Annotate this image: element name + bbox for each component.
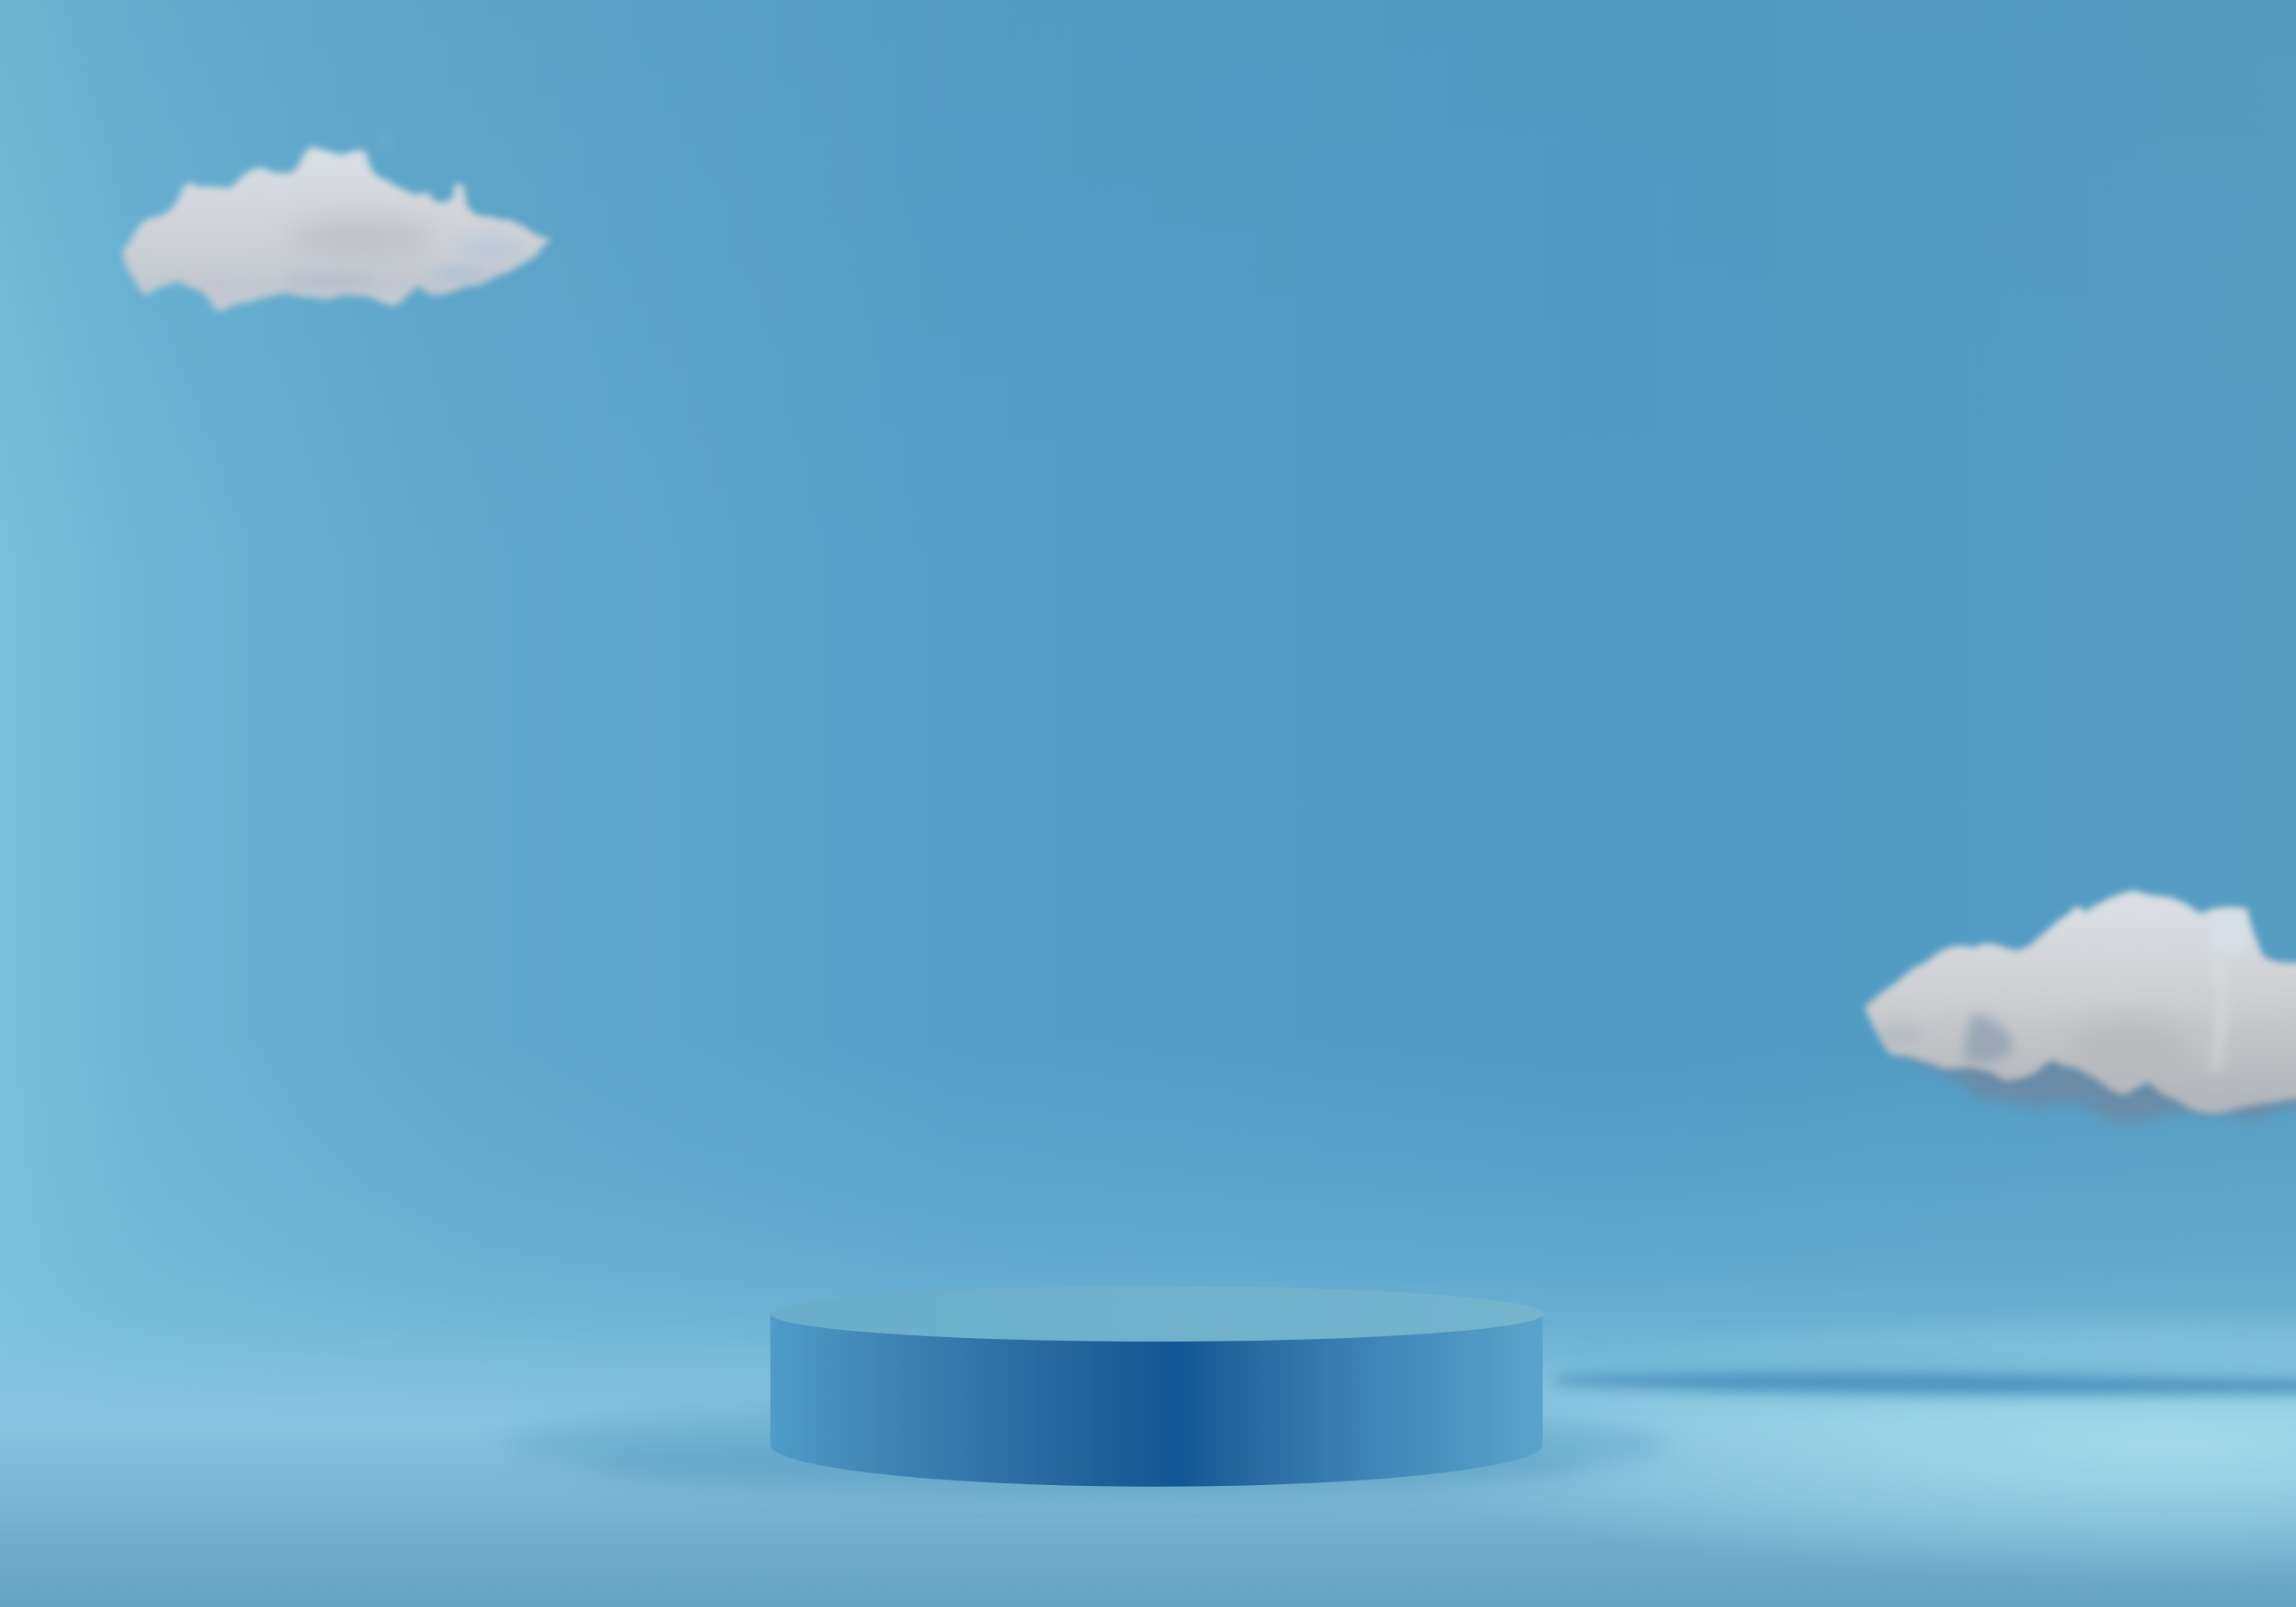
cloud body [1865, 890, 2296, 1115]
shadow band on the right horizon [1556, 1359, 2296, 1394]
cloud right edge [1865, 890, 2296, 1122]
podium contact shadow on floor [504, 1401, 1670, 1490]
podium top surface [770, 1286, 1544, 1342]
podium side [770, 1314, 1543, 1487]
cloud top-left [123, 138, 550, 311]
podium cylinder [770, 1286, 1544, 1487]
cloud underside shadow [1895, 1029, 2296, 1122]
